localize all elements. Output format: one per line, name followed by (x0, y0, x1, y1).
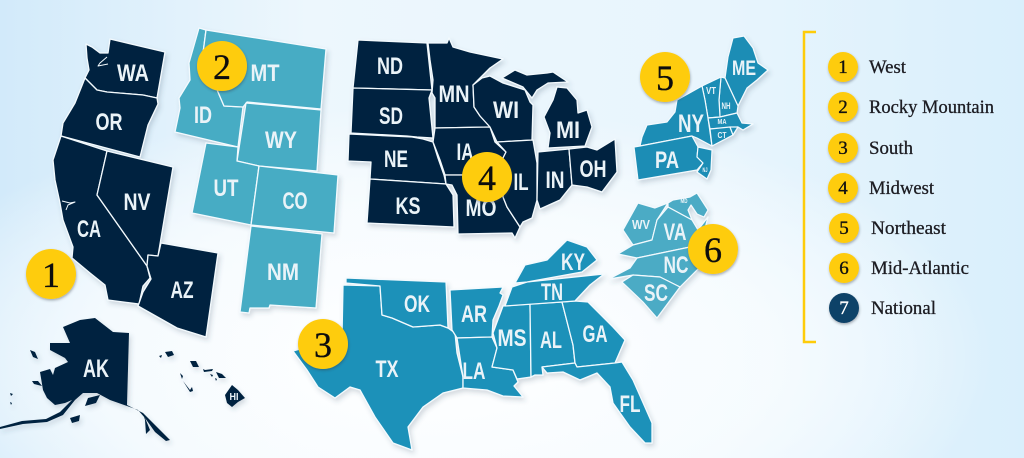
state: Wyoming: WY (265, 127, 297, 154)
state: Virginia: VA (664, 219, 686, 246)
region: Northeast states (634, 36, 768, 180)
region: Alaska and Hawaii (0, 318, 245, 441)
state: Maine: ME (732, 57, 756, 80)
state: New York (640, 86, 712, 146)
legend item: Northeast: 5 (839, 218, 849, 239)
state: Pennsylvania (634, 136, 703, 180)
state: New Hampshire (719, 77, 738, 117)
state: Oregon (61, 78, 158, 157)
state: Nevada (97, 151, 173, 266)
state: Oklahoma: OK (404, 291, 430, 318)
state: Utah: UT (214, 175, 239, 202)
state: Iowa (433, 127, 506, 175)
state: Nebraska: NE (384, 146, 408, 173)
state: Nevada: NV (124, 189, 150, 216)
legend item: Midwest: Midwest (869, 178, 935, 199)
state: Hawaii (159, 351, 245, 407)
state: Indiana (537, 149, 572, 209)
state: Arizona (138, 243, 218, 337)
state: Oregon: OR (96, 109, 122, 136)
marker: region 6: 6 (704, 230, 722, 270)
state: Montana: MT (250, 60, 280, 87)
state: Connecticut (710, 127, 733, 146)
state: Colorado: CO (282, 188, 308, 215)
state: Texas (293, 285, 463, 450)
legend item: Rocky Mountain (828, 92, 994, 122)
state: Kansas (367, 179, 454, 227)
state: Louisiana (457, 337, 523, 397)
state: Illinois (497, 140, 537, 227)
legend item: South: South (869, 138, 913, 159)
state: Ohio: OH (580, 156, 606, 183)
state: Vermont (702, 77, 721, 118)
state: Idaho (175, 28, 243, 147)
state: Iowa: IA (456, 139, 474, 166)
state: Kentucky (515, 240, 597, 283)
state: Arkansas: AR (461, 301, 487, 328)
state: Alaska: AK (83, 355, 109, 383)
legend item: South: 3 (838, 138, 848, 159)
marker: region 6 (688, 224, 738, 274)
state: Maryland and Delaware: MD (680, 199, 688, 205)
state: Connecticut: CT (718, 131, 727, 140)
state: California (53, 136, 150, 304)
marker: region 4: 4 (478, 158, 496, 198)
region: Rocky Mountain states (175, 28, 338, 313)
region: Midwest states (348, 38, 617, 238)
state: Wisconsin: WI (493, 97, 519, 124)
state: South Dakota (351, 88, 433, 138)
legend item: West: 1 (838, 57, 848, 78)
marker: region 2: 2 (213, 47, 231, 87)
legend item: National (829, 293, 936, 323)
state: Hawaii: HI (230, 392, 239, 403)
legend item: Midwest (828, 173, 935, 203)
state: North Dakota (353, 40, 432, 90)
state: New Jersey: NJ (702, 168, 708, 174)
legend item: South (828, 133, 913, 163)
state: Nebraska (348, 134, 446, 184)
state: Pennsylvania: PA (655, 147, 679, 174)
state: Louisiana: LA (462, 358, 486, 385)
state: Tennessee: TN (541, 279, 563, 306)
state: Michigan: MI (556, 117, 580, 144)
marker: region 5: 5 (656, 58, 674, 98)
state: Washington (85, 39, 165, 98)
state: New Mexico (240, 226, 322, 313)
state: Alaska (0, 318, 170, 441)
legend item: National: National (871, 298, 936, 319)
region: South states (293, 240, 652, 450)
state: North Dakota: ND (377, 53, 403, 80)
state: Montana (203, 30, 326, 109)
state: Missouri: MO (466, 195, 496, 222)
state: North Carolina: NC (664, 252, 688, 279)
state: Kentucky: KY (561, 249, 585, 276)
legend item: Midwest: 4 (838, 178, 848, 199)
state: Mississippi: MS (498, 325, 526, 352)
state: Florida: FL (620, 391, 640, 418)
state: Kansas: KS (396, 193, 420, 220)
state: Florida (542, 362, 652, 443)
state: New Jersey (697, 147, 712, 179)
state: New Mexico: NM (267, 259, 299, 286)
state: Mississippi (492, 304, 531, 379)
marker: region 4 (462, 152, 512, 202)
region: Mid-Atlantic states (609, 193, 708, 318)
legend item: West (828, 52, 907, 82)
state: Wisconsin (473, 76, 533, 142)
state: Rhode Island (730, 127, 738, 135)
state: Georgia (562, 301, 625, 367)
legend (804, 32, 994, 342)
state: Massachusetts (708, 113, 753, 130)
marker: region 1: 1 (42, 255, 60, 295)
state: New York: NY (678, 110, 704, 138)
state: Illinois: IL (514, 169, 528, 196)
state: West Virginia: WV (632, 217, 650, 232)
state: Utah (192, 143, 259, 225)
marker: region 3 (298, 319, 348, 369)
state: Indiana: IN (546, 167, 564, 194)
state: California: CA (77, 216, 101, 243)
state: New Hampshire: NH (722, 101, 730, 111)
state: Maine (725, 36, 768, 106)
state: Alabama: AL (540, 327, 562, 354)
state: Massachusetts: MA (718, 119, 726, 126)
marker: region 5 (640, 52, 690, 102)
state: Vermont: VT (706, 86, 716, 97)
legend item: West: West (869, 57, 907, 78)
state: Minnesota (428, 38, 503, 128)
state: Colorado (251, 166, 338, 233)
state: Minnesota: MN (438, 81, 470, 108)
state: South Dakota: SD (379, 103, 403, 130)
legend item: Rocky Mountain: Rocky Mountain (869, 97, 994, 118)
legend item: Rocky Mountain: 2 (838, 97, 848, 118)
state: Texas: TX (376, 356, 398, 383)
marker: region 2 (197, 41, 247, 91)
legend item: Northeast: Northeast (871, 218, 947, 239)
state: Tennessee (505, 274, 604, 306)
state: Washington: WA (117, 60, 149, 87)
state: Idaho: ID (194, 102, 212, 129)
state: Michigan (502, 70, 592, 148)
legend item: Mid-Atlantic (829, 253, 969, 283)
state: Missouri (445, 175, 520, 238)
legend item: Northeast (829, 213, 947, 243)
region: West states (53, 39, 218, 337)
state: Arkansas (450, 287, 503, 338)
marker: region 1 (26, 249, 76, 299)
state: Arizona: AZ (170, 277, 194, 304)
marker: region 3: 3 (314, 325, 332, 365)
state: Wyoming (237, 103, 321, 171)
state: Oklahoma (346, 278, 448, 328)
legend item: National: 7 (839, 298, 849, 319)
legend item: Mid-Atlantic: Mid-Atlantic (871, 258, 969, 279)
state: South Carolina: SC (644, 280, 668, 307)
state: Ohio (569, 139, 617, 192)
legend bracket (804, 32, 816, 342)
state: Georgia: GA (582, 321, 608, 348)
legend item: Mid-Atlantic: 6 (839, 258, 849, 279)
state: Alabama (530, 302, 575, 377)
